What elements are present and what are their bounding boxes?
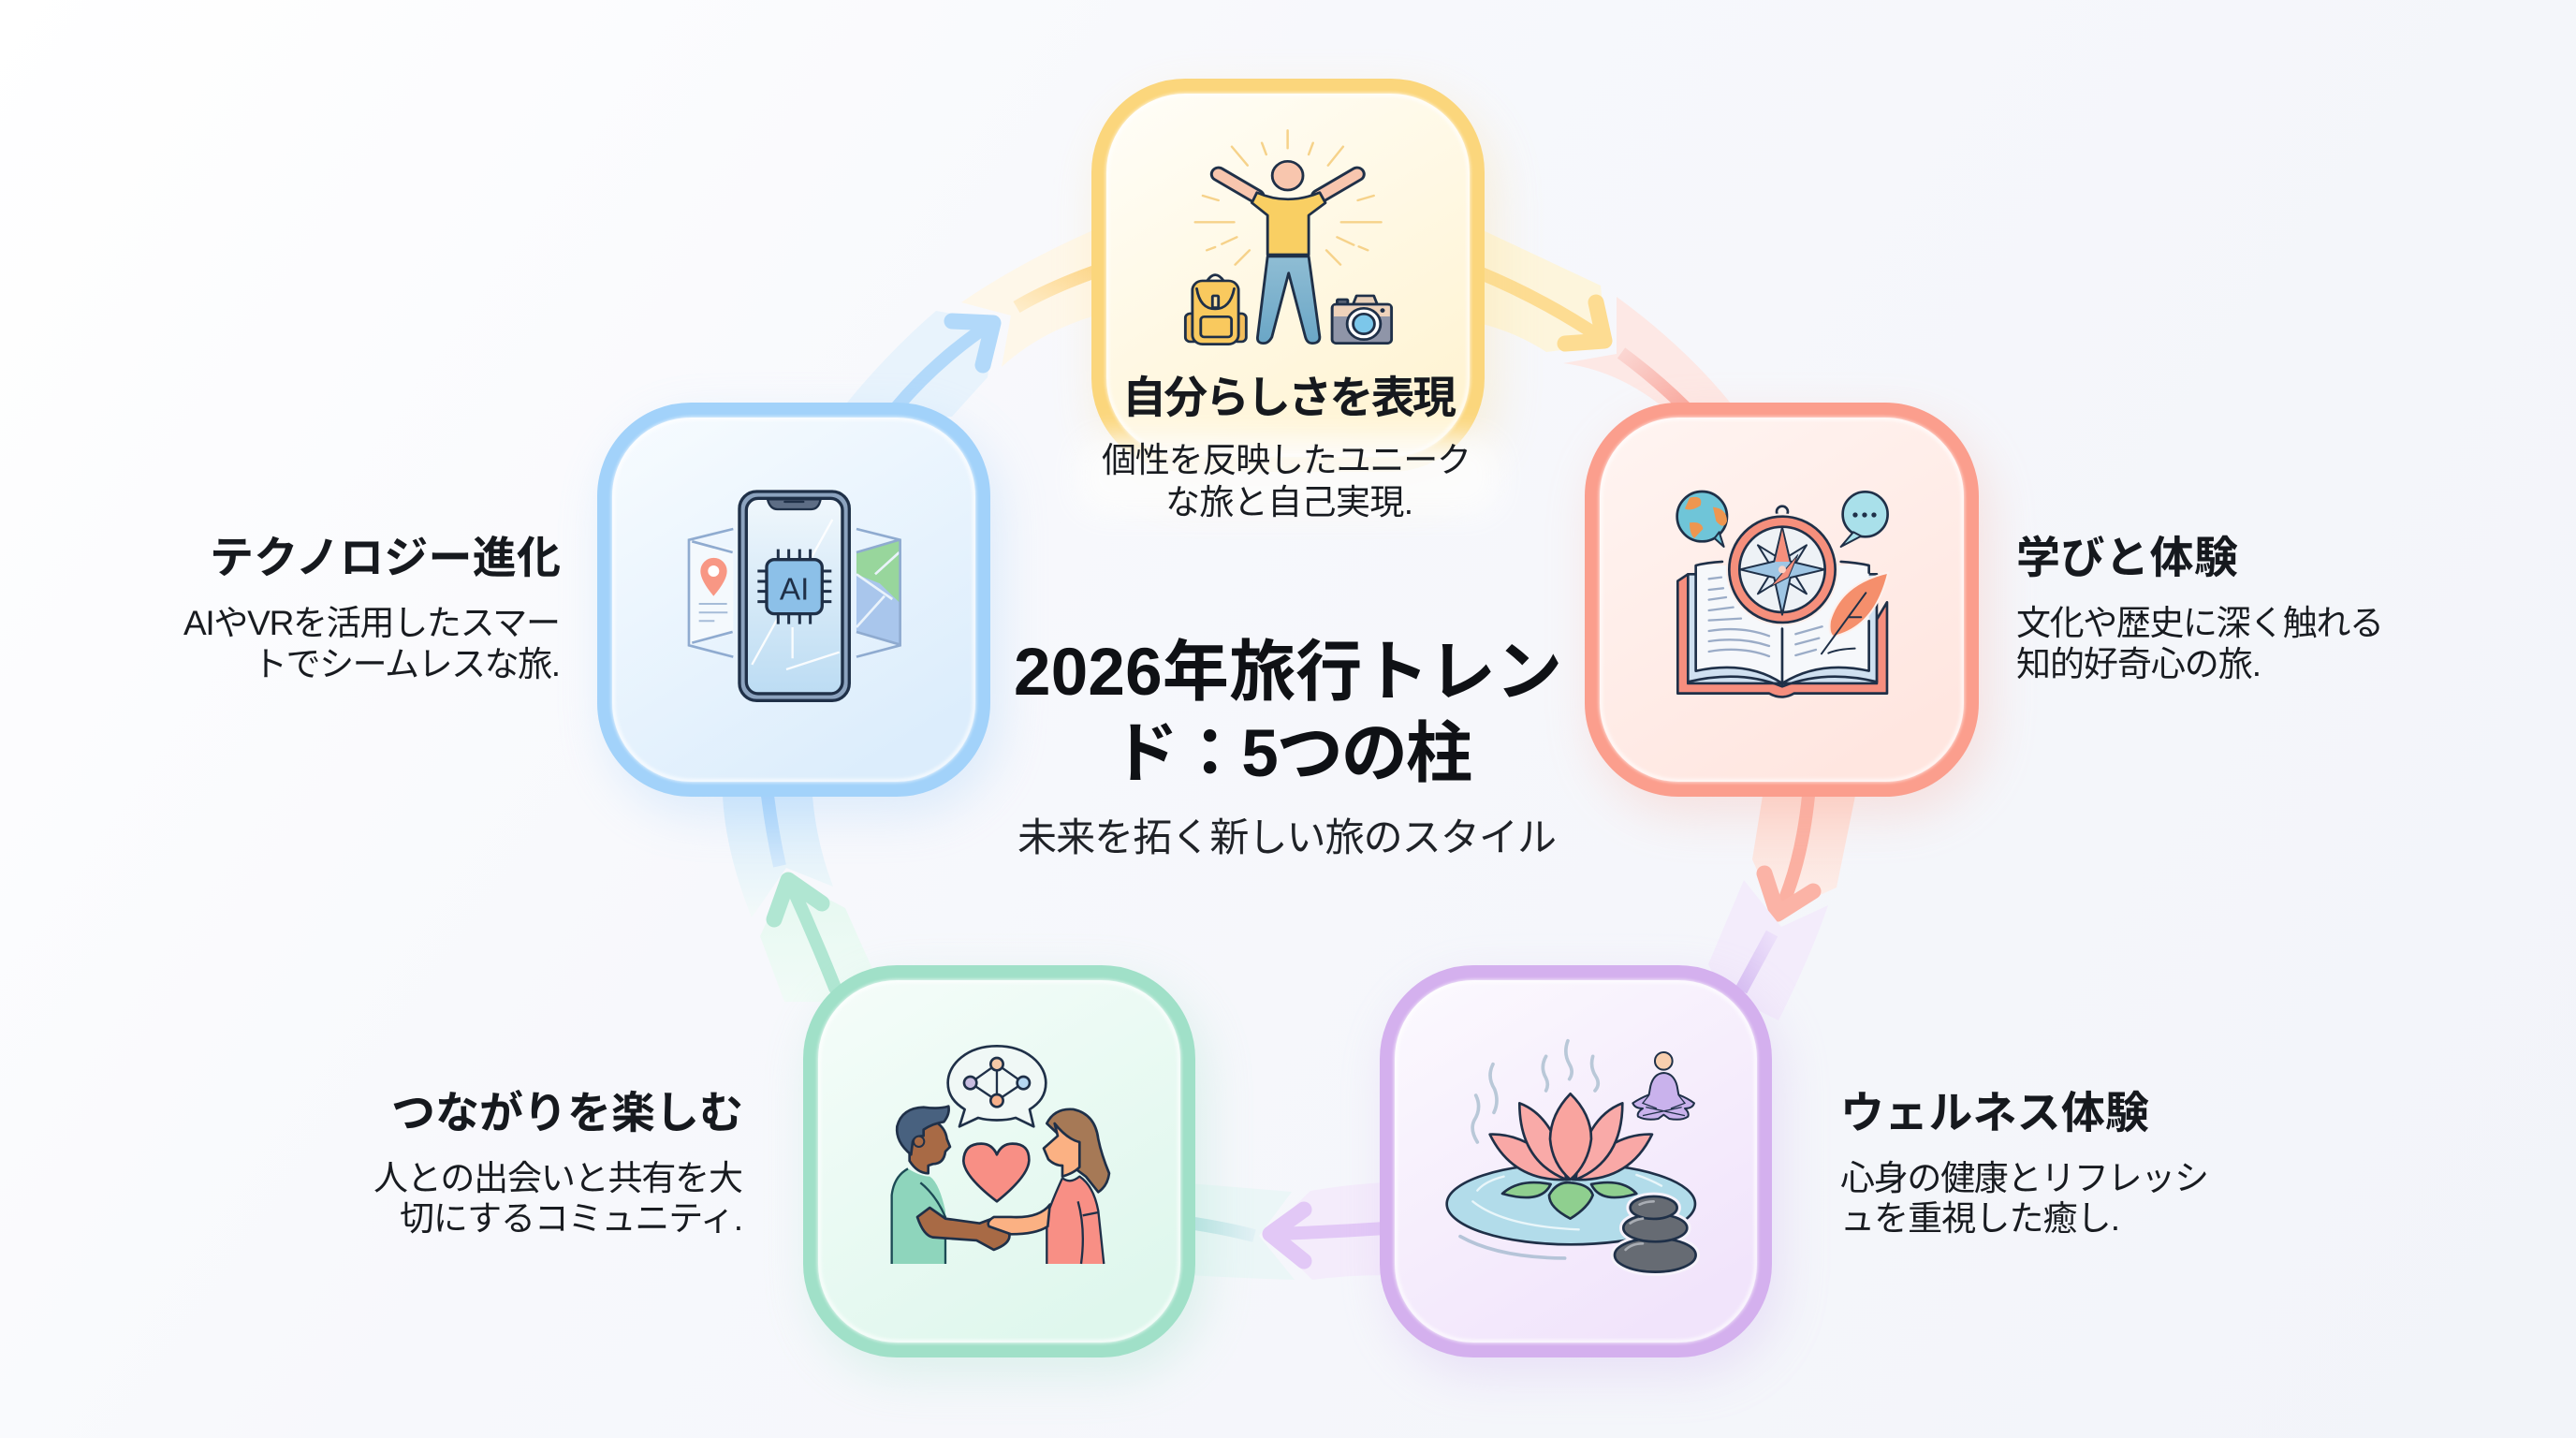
arrow: purple to green: [1266, 880, 1828, 1280]
panel: blue card technology: [605, 410, 1000, 814]
icon: two people shaking hands with heart and network bubble: [891, 1046, 1109, 1264]
title: 2026年旅行トレン: [1014, 636, 1562, 710]
arrow: green to blue: [760, 877, 1295, 1280]
text block: technology: [183, 533, 561, 683]
arrow: blue to yellow: [723, 229, 1095, 917]
icon: person with backpack and camera: [1185, 130, 1392, 345]
text block: self-expression: な旅と自己実現.: [1165, 483, 1413, 521]
title: [1014, 636, 1562, 791]
icon: smartphone with AI chip and maps: [689, 492, 900, 700]
text block: learning: 文化や歴史に深く触れる: [2016, 604, 2384, 642]
text block: wellness: 心身の健康とリフレッシ: [1840, 1159, 2209, 1197]
text block: self-expression: [1102, 373, 1471, 521]
text block: technology: テクノロジー進化: [210, 533, 561, 582]
text block: self-expression: 自分らしさを表現: [1122, 373, 1456, 422]
arrow: yellow to red: [1479, 228, 1606, 352]
panel: green card connection: [811, 973, 1205, 1375]
text block: learning: 知的好奇心の旅.: [2016, 645, 2261, 683]
text block: self-expression: 個性を反映したユニーク: [1102, 441, 1471, 479]
text block: technology: トでシームレスな旅.: [253, 645, 561, 683]
text block: learning: [2016, 533, 2384, 683]
text block: wellness: ュを重視した癒し.: [1840, 1199, 2120, 1238]
text block: connection: 切にするコミュニティ.: [400, 1199, 743, 1238]
subtitle: 未来を拓く新しい旅のスタイル: [1017, 815, 1557, 859]
text block: wellness: ウェルネス体験: [1840, 1088, 2149, 1137]
title: ド：5つの柱: [1112, 717, 1472, 791]
text block: connection: 人との出会いと共有を大: [373, 1159, 743, 1197]
icon: lotus, stones and meditating person: [1447, 1041, 1696, 1272]
text block: connection: つながりを楽しむ: [391, 1088, 743, 1137]
arrow: red to purple: [1563, 297, 1855, 915]
panel: red card learning: [1592, 410, 1988, 815]
text block: wellness: [1840, 1088, 2209, 1238]
text block: technology: AIやVRを活用したスマー: [183, 604, 561, 642]
icon: smartphone with AI chip and maps: AI: [780, 573, 809, 608]
panel: yellow card self-expression: [1076, 86, 1500, 515]
text block: learning: 学びと体験: [2016, 533, 2238, 582]
text block: connection: [373, 1088, 743, 1238]
panel: purple card wellness: [1387, 973, 1781, 1375]
icon: book, compass, globe and speech bubble: [1677, 492, 1888, 697]
